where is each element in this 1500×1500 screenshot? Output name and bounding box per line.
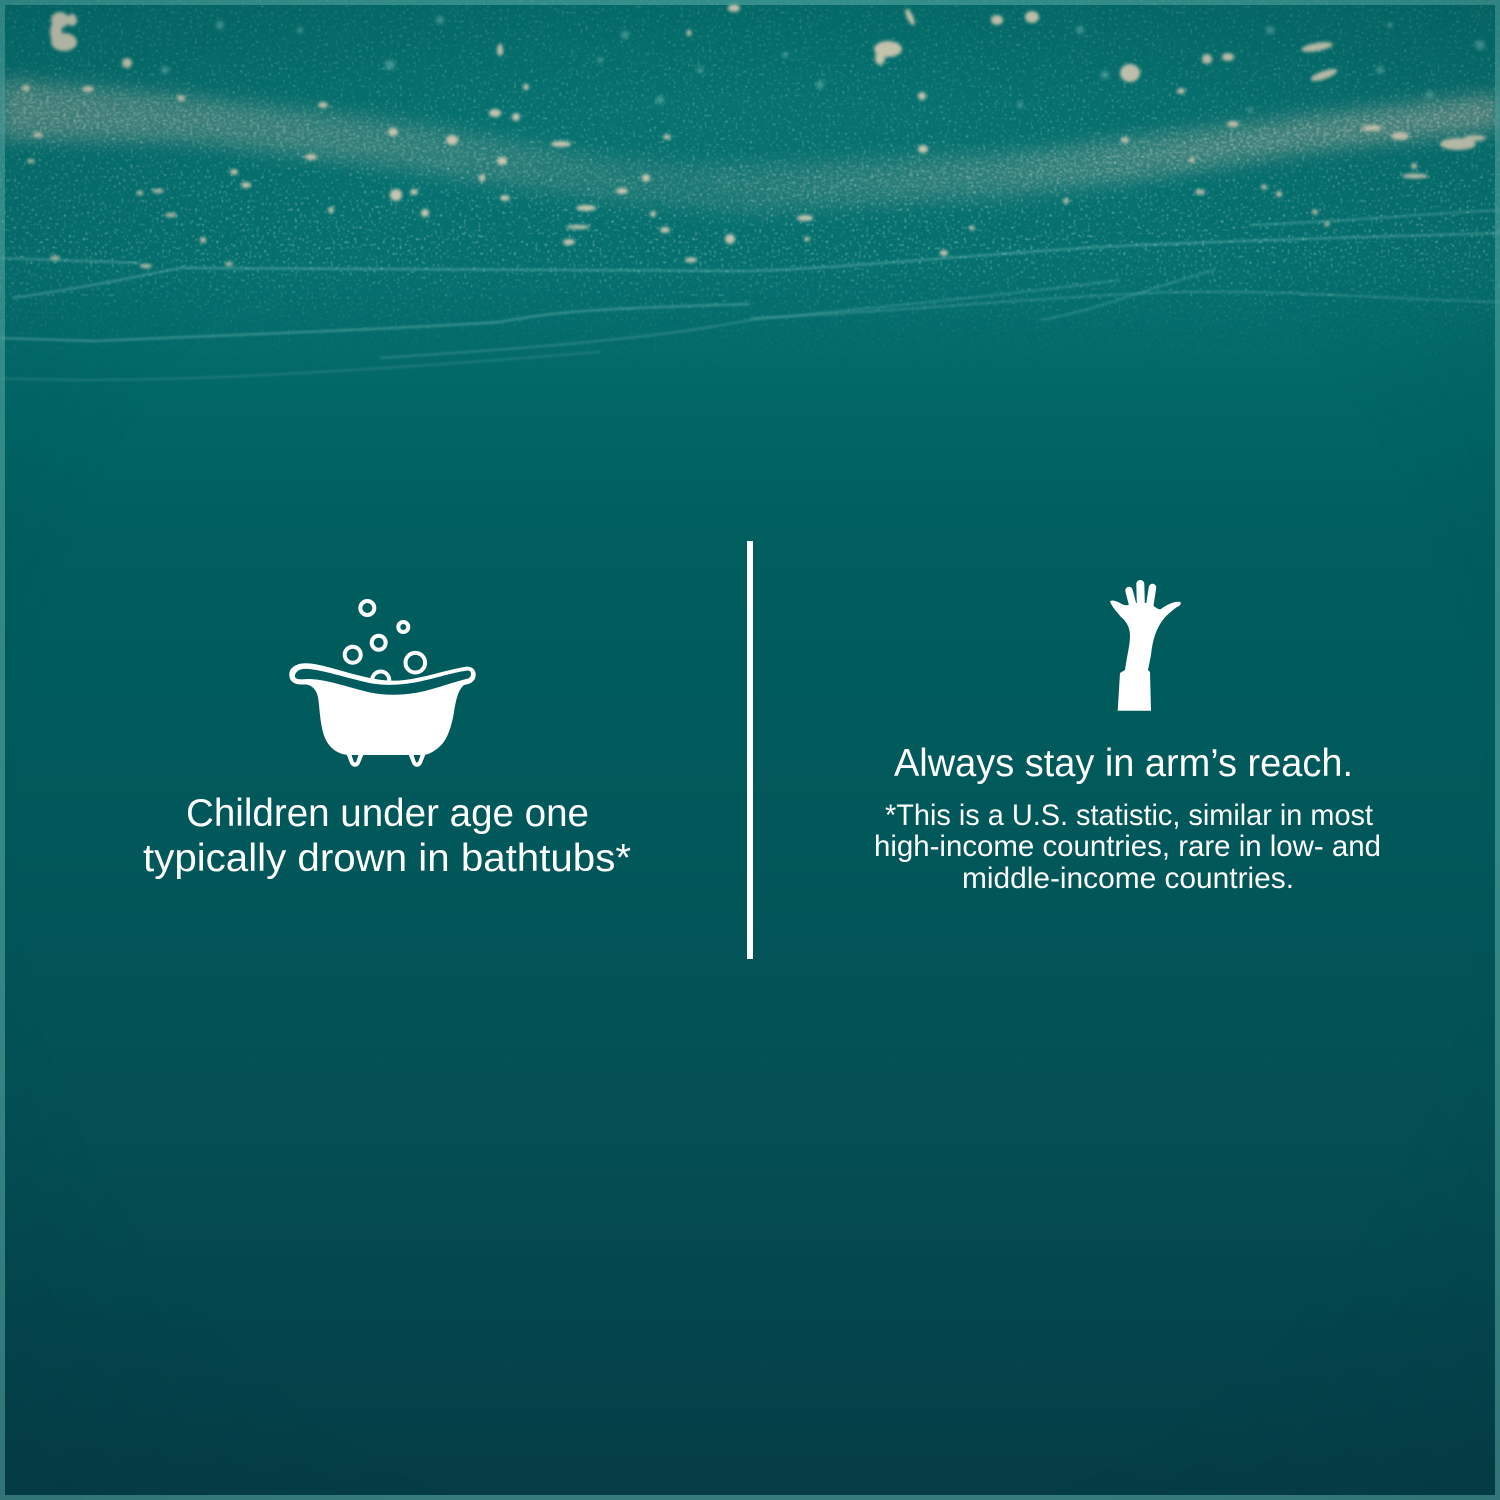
surface ripple lines (0, 210, 1500, 380)
text: bathtub drowning statement: typically drown in bathtubs* (143, 837, 631, 880)
icon: bathtub with bubbles (289, 601, 476, 767)
faint water droplets (161, 16, 1485, 113)
text: statistic footnote (874, 799, 1381, 895)
icon: raised hand (1110, 584, 1181, 711)
divider (747, 541, 753, 959)
floating particles (22, 4, 1486, 268)
text: arm's reach heading: Always stay in arm’s reach. (894, 742, 1353, 785)
grain inside the haze band (0, 74, 1499, 216)
panel: right supervision advice (874, 584, 1381, 895)
panel: left bathtub fact (143, 601, 631, 880)
text: bathtub drowning statement (143, 792, 631, 880)
text: statistic footnote: high-income countries, rare in low- and (874, 830, 1381, 863)
surface haze band (0, 80, 1500, 212)
text: bathtub drowning statement: Children under age one (186, 792, 589, 835)
text: statistic footnote: middle-income countries. (962, 862, 1294, 895)
text: statistic footnote: *This is a U.S. statistic, similar in most (885, 799, 1374, 832)
fine water speckles (0, 0, 1500, 380)
